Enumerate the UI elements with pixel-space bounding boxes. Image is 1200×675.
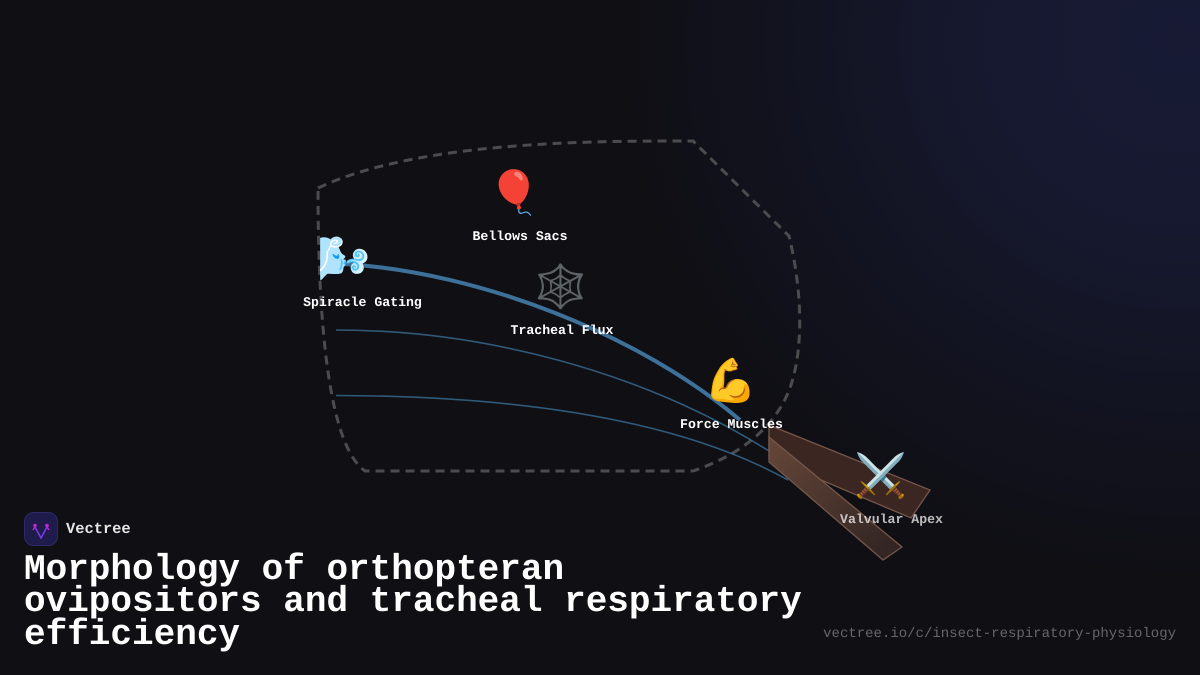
icon: spiracle gating: 🌬️ bbox=[317, 235, 370, 284]
ovipositor valves bbox=[769, 425, 930, 560]
title: ovipositors and tracheal respiratory bbox=[24, 581, 802, 622]
label: force muscles: Force Muscles bbox=[680, 417, 783, 432]
source url: vectree.io/c/insect-respiratory-physiology bbox=[823, 626, 1176, 642]
icon: tracheal flux: 🕸️ bbox=[534, 263, 587, 312]
label: valvular apex: Valvular Apex bbox=[840, 512, 943, 527]
tracheal airflow lines bbox=[336, 264, 788, 480]
icon: force muscles: 💪 bbox=[704, 357, 757, 406]
title: efficiency bbox=[24, 614, 240, 655]
label: spiracle gating: Spiracle Gating bbox=[303, 295, 422, 310]
title: Morphology of orthopteran bbox=[24, 549, 564, 590]
brand name: Vectree bbox=[66, 520, 131, 538]
body outline bbox=[318, 141, 800, 471]
logo mark bbox=[24, 512, 58, 546]
icon: bellows sacs: 🎈 bbox=[488, 169, 540, 218]
icon: valvular apex: ⚔️ bbox=[854, 452, 907, 501]
label: tracheal flux: Tracheal Flux bbox=[511, 323, 613, 338]
title bbox=[24, 549, 802, 655]
label: bellows sacs: Bellows Sacs bbox=[473, 229, 567, 244]
